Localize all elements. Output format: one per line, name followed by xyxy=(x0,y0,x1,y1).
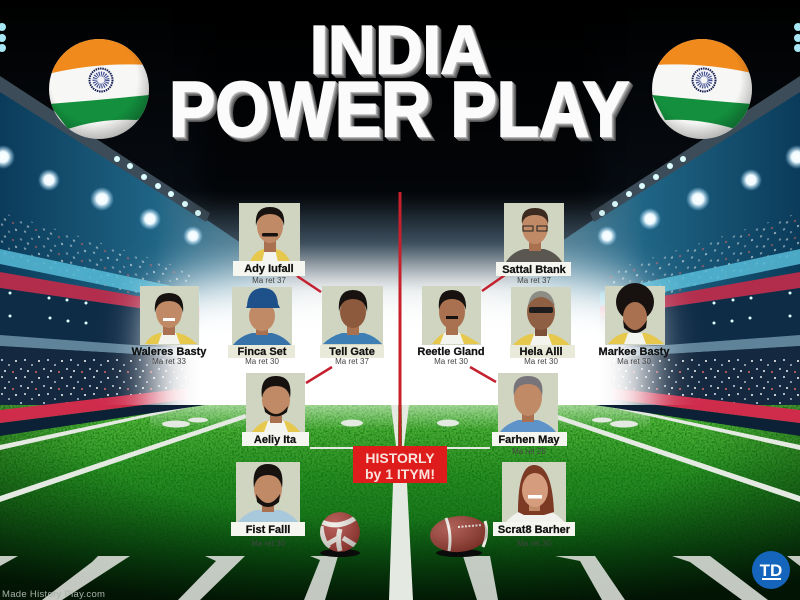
player: Sattal Btank xyxy=(496,203,571,285)
watermark: Made History Play.com xyxy=(2,589,105,600)
player: Finca Set: Finca Set xyxy=(238,346,287,358)
player: Waleres Basty: Ma ret 33 xyxy=(152,357,186,366)
player: Tell Gate: Tell Gate xyxy=(329,346,375,358)
player: Farhen May: Farhen May xyxy=(498,434,560,446)
player: Aeliy Ita: Aeliy Ita xyxy=(254,434,297,446)
stadium background xyxy=(0,0,800,408)
end zone ticks xyxy=(0,556,800,600)
title xyxy=(169,12,629,153)
player: Fist Falll xyxy=(231,462,305,548)
player: Finca Set xyxy=(228,287,295,366)
player: Scrat8 Barher: Ma ret 30 xyxy=(517,539,551,548)
player: Hela Alll: Hela Alll xyxy=(520,346,562,358)
player: Farhen May xyxy=(492,373,567,456)
player: Aeliy Ita xyxy=(242,373,309,446)
player: Finca Set: Ma ret 30 xyxy=(245,357,279,366)
callout badge xyxy=(353,446,447,483)
connector lines xyxy=(297,275,505,383)
player: Scrat8 Barher: Scrat8 Barher xyxy=(498,524,571,536)
top dark vignette xyxy=(200,0,600,205)
player: Markee Basty: Ma ret 30 xyxy=(617,357,651,366)
player: Hela Alll: Ma ret 30 xyxy=(524,357,558,366)
yard lines xyxy=(0,405,800,600)
stand wall right xyxy=(595,388,800,436)
icon: round ball xyxy=(320,512,360,552)
player: Fist Falll: Ma ret 30 xyxy=(251,539,285,548)
player: Ady Iufall: Ma ret 37 xyxy=(252,276,286,285)
player: Ady Iufall: Ady Iufall xyxy=(244,263,294,275)
callout badge: HISTORLY xyxy=(365,450,435,466)
player: Reetle Gland: Reetle Gland xyxy=(417,346,485,358)
center divider xyxy=(398,192,402,447)
central white glow xyxy=(150,285,650,465)
logo badge: TD xyxy=(760,561,782,580)
chakra xyxy=(90,68,112,92)
title: INDIA xyxy=(310,12,488,88)
player: Fist Falll: Fist Falll xyxy=(246,524,290,536)
player: Waleres Basty: Waleres Basty xyxy=(132,346,207,358)
icon: round ball shadow xyxy=(320,549,360,557)
player: Reetle Gland xyxy=(417,286,485,366)
floodlights xyxy=(0,23,800,246)
flag right xyxy=(652,39,752,139)
callout badge: by 1 ITYM! xyxy=(365,466,435,482)
title: POWER PLAY xyxy=(169,65,629,153)
stand wall left xyxy=(0,388,205,436)
right stand xyxy=(490,90,800,408)
player: Scrat8 Barher xyxy=(493,462,575,548)
logo badge xyxy=(752,551,790,589)
flag left xyxy=(49,39,149,139)
player: Hela Alll xyxy=(510,287,575,366)
player: Ady Iufall xyxy=(233,203,305,285)
player: Sattal Btank: Sattal Btank xyxy=(502,264,567,276)
player: Farhen May: Ma ret 25 xyxy=(512,447,546,456)
roof beams xyxy=(0,76,800,222)
football field xyxy=(0,405,800,600)
chakra xyxy=(692,68,716,92)
left stand xyxy=(0,90,310,408)
player: Sattal Btank: Ma ret 37 xyxy=(517,276,551,285)
player: Tell Gate: Ma ret 37 xyxy=(335,357,369,366)
player: Waleres Basty xyxy=(132,286,207,366)
player: Markee Basty xyxy=(599,283,670,366)
player: Tell Gate xyxy=(320,286,384,366)
player: Markee Basty: Markee Basty xyxy=(599,346,670,358)
icon: american football xyxy=(429,514,489,557)
player: Reetle Gland: Ma ret 30 xyxy=(434,357,468,366)
